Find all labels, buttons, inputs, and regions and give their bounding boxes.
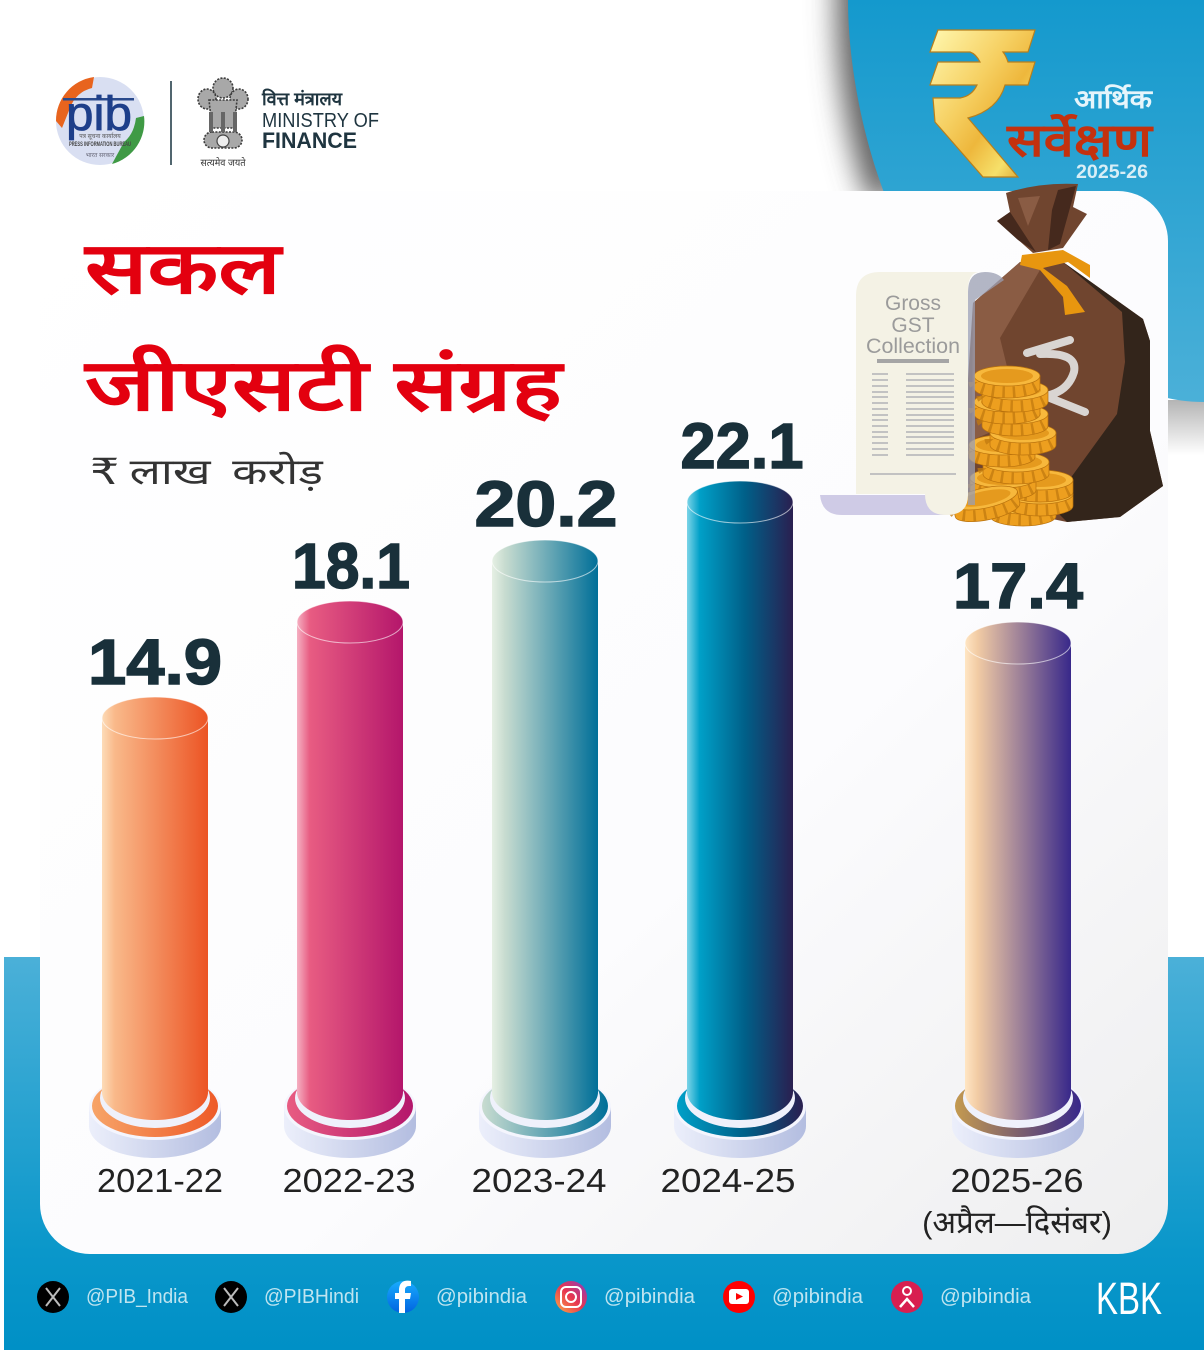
ministry text: MINISTRY OF [262,110,379,132]
survey logo: 2025-26 [1076,162,1148,183]
social: facebook [387,1281,528,1313]
bar 2021-22 [88,626,223,1199]
bar 2025-26: (अप्रैल—दिसंबर) [922,1205,1112,1240]
social footer [37,1273,1162,1324]
bar 2022-23: 18.1 [292,530,410,602]
logo: PIB: पत्र सूचना कार्यालय [79,132,121,140]
social: X PIBHindi [215,1281,359,1313]
logo: PIB: भारत सरकार [86,153,115,159]
title: जीएसटी संग्रह [83,344,566,425]
social: X PIBHindi: @PIBHindi [264,1286,359,1308]
social: youtube: @pibindia [772,1286,864,1308]
bar 2025-26: 2025-26 [950,1162,1084,1199]
bar 2025-26 [922,550,1112,1240]
bottom blue band [4,957,1204,1350]
survey logo [930,30,1154,183]
unit subtitle: लाख [130,452,212,492]
main white card [40,191,1168,1254]
logo: national emblem [198,78,248,169]
icon: GST scroll: Gross [885,292,941,315]
social: instagram [555,1281,696,1313]
title [83,228,566,425]
top panel shadows [836,0,1204,455]
top right blue header panel [848,0,1204,402]
ministry text: वित्त मंत्रालय [261,88,344,109]
social: facebook: @pibindia [436,1286,528,1308]
initials KBK: KBK [1096,1273,1162,1324]
ministry text [261,88,379,153]
logo: national emblem: सत्यमेव जयते [200,157,246,169]
logo: PIB: PRESS INFORMATION BUREAU [69,142,131,148]
bar 2023-24 [472,468,618,1199]
bar 2024-25 [660,410,806,1199]
bar 2021-22: 2021-22 [97,1162,223,1199]
bar 2023-24: 2023-24 [472,1162,606,1199]
unit subtitle: करोड़ [232,451,324,492]
icon: gold rupee [930,30,1035,177]
icon: GST scroll [820,272,1004,515]
logo: PIB: pib [66,88,132,141]
social: koo: @pibindia [940,1286,1032,1308]
logo divider [170,81,172,165]
bar chart [88,410,1112,1240]
unit subtitle: ₹ [90,452,119,492]
icon: GST scroll: Collection [866,335,960,358]
social: koo [891,1281,1032,1313]
bar 2021-22: 14.9 [88,626,222,698]
ministry text: FINANCE [262,128,357,153]
social: X PIB_India: @PIB_India [86,1286,189,1308]
social: youtube [723,1281,864,1313]
social: instagram: @pibindia [604,1286,696,1308]
social: X PIB_India [37,1281,189,1313]
bar 2022-23 [282,530,416,1199]
bar 2025-26: 17.4 [953,550,1083,622]
bar 2024-25: 2024-25 [660,1162,796,1199]
bar 2022-23: 2022-23 [282,1162,416,1199]
survey logo: सर्वेक्षण [1006,114,1154,166]
bar 2023-24: 20.2 [474,468,618,540]
icon: money bag [960,184,1163,522]
title: सकल [83,228,284,309]
bar 2024-25: 22.1 [680,410,804,482]
icon: gold coins stack [951,366,1073,526]
survey logo: आर्थिक [1074,83,1154,114]
icon: GST scroll: GST [891,314,935,337]
logo: PIB [56,77,144,165]
